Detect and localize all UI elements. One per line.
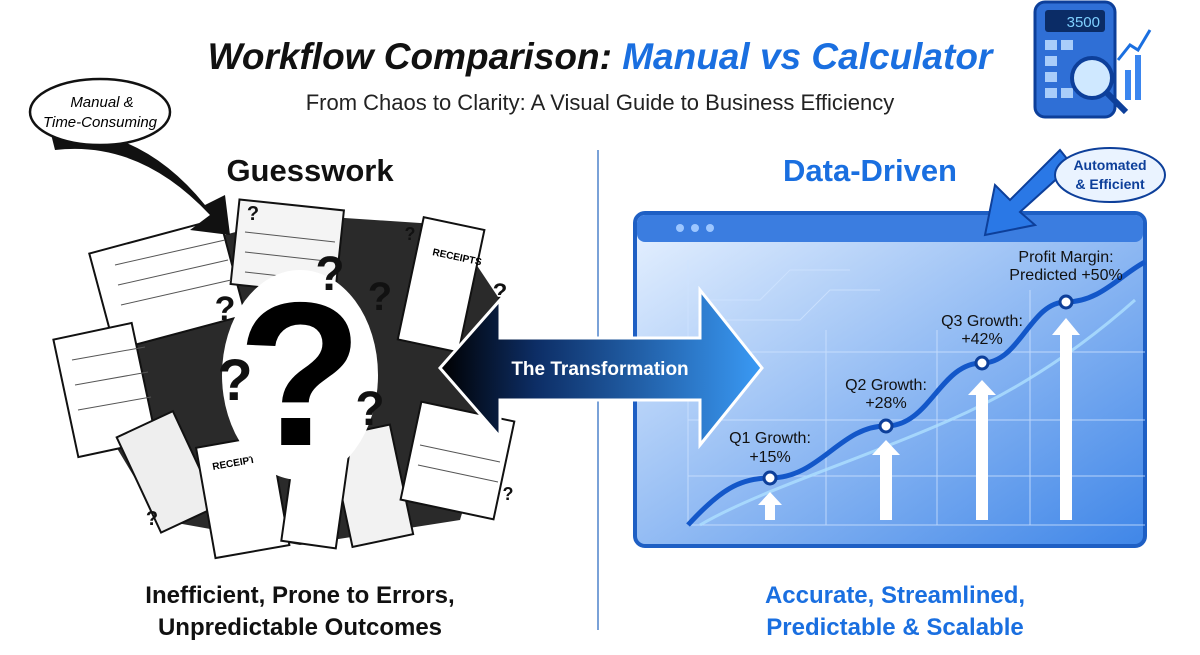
heading: Guesswork: Guesswork	[226, 153, 394, 188]
panel: dashboard: Q1 Growth:	[729, 430, 811, 447]
text: right outcome: Predictable & Scalable	[766, 614, 1024, 641]
text: left outcome: Unpredictable Outcomes	[158, 614, 442, 641]
callout: automated: & Efficient	[1075, 176, 1145, 192]
title: Workflow Comparison: Manual vs Calculator	[208, 36, 992, 77]
callout: automated	[985, 148, 1165, 235]
callout: manual: Time-Consuming	[43, 114, 158, 131]
panel: chaos pile: ?	[237, 260, 363, 489]
text: left outcome: Inefficient, Prone to Errors,	[145, 582, 455, 609]
subtitle: From Chaos to Clarity: A Visual Guide to Business Efficiency	[306, 90, 894, 115]
panel: dashboard	[635, 213, 1145, 546]
panel: dashboard: +28%	[865, 395, 907, 412]
panel: dashboard: +15%	[749, 449, 791, 466]
panel: chaos pile: ?	[493, 279, 507, 306]
panel: chaos pile: ?	[146, 508, 158, 530]
panel: chaos pile: ?	[215, 290, 235, 328]
callout: manual	[30, 79, 230, 235]
text: right outcome	[765, 582, 1025, 641]
arrow: transformation	[440, 290, 762, 445]
panel: chaos pile: RECEIPTS	[212, 453, 263, 473]
panel: dashboard: +42%	[961, 331, 1003, 348]
panel: dashboard: Profit Margin:	[1018, 249, 1114, 266]
panel: chaos pile: ?	[368, 275, 392, 319]
panel: dashboard: Q3 Growth:	[941, 313, 1023, 330]
panel: dashboard: Predicted +50%	[1009, 267, 1123, 284]
panel: chaos pile	[53, 199, 514, 558]
panel: chaos pile: ?	[404, 224, 416, 244]
panel: chaos pile: ?	[315, 248, 345, 301]
icon: calculator: 3500	[1067, 14, 1100, 31]
panel: chaos pile: ?	[217, 348, 253, 413]
callout: manual: Manual &	[70, 94, 134, 111]
panel: chaos pile: RECEIPTS	[431, 247, 483, 268]
icon: calculator	[1035, 2, 1150, 117]
callout: automated: Automated	[1073, 157, 1147, 173]
panel: chaos pile: ?	[355, 383, 385, 436]
panel: chaos pile: ?	[502, 484, 514, 504]
arrow: transformation: The Transformation	[511, 359, 689, 380]
panel: dashboard: Q2 Growth:	[845, 377, 927, 394]
heading: Data-Driven: Data-Driven	[783, 153, 957, 188]
text: right outcome: Accurate, Streamlined,	[765, 582, 1025, 609]
panel: chaos pile: ?	[247, 203, 259, 225]
text: left outcome	[145, 582, 455, 641]
